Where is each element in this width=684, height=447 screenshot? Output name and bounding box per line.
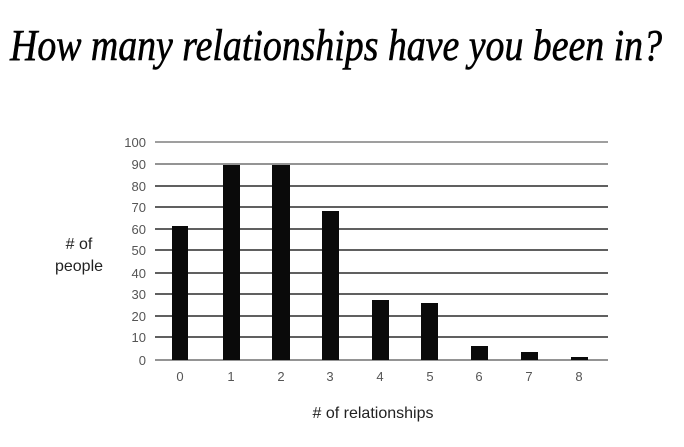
- y-axis labels: 100: [124, 135, 146, 150]
- x-axis labels: 5: [426, 369, 434, 384]
- y-axis labels: 40: [132, 266, 146, 281]
- x-axis labels: 8: [575, 369, 583, 384]
- y-axis labels: [124, 135, 146, 368]
- x-axis labels: 7: [525, 369, 533, 384]
- x-axis labels: 0: [176, 369, 184, 384]
- y-axis labels: 70: [132, 200, 146, 215]
- x-axis labels: [176, 369, 583, 384]
- x-axis labels: 6: [475, 369, 483, 384]
- bars: [172, 165, 588, 360]
- bar chart: [124, 135, 608, 384]
- x-axis labels: 1: [227, 369, 235, 384]
- y-axis labels: 90: [132, 157, 146, 172]
- x-axis labels: 4: [376, 369, 384, 384]
- y-axis labels: 80: [132, 179, 146, 194]
- y-axis title: # of: [66, 236, 93, 253]
- y-axis labels: 20: [132, 309, 146, 324]
- y-axis labels: 0: [139, 353, 146, 368]
- y-axis title: people: [55, 258, 103, 275]
- y-axis title: [55, 236, 103, 275]
- y-axis labels: 10: [132, 330, 146, 345]
- y-axis labels: 60: [132, 222, 146, 237]
- y-axis labels: 30: [132, 287, 146, 302]
- x-axis labels: 2: [277, 369, 285, 384]
- x-axis labels: 3: [326, 369, 334, 384]
- y-axis labels: 50: [132, 243, 146, 258]
- x-axis title: # of relationships: [313, 405, 433, 422]
